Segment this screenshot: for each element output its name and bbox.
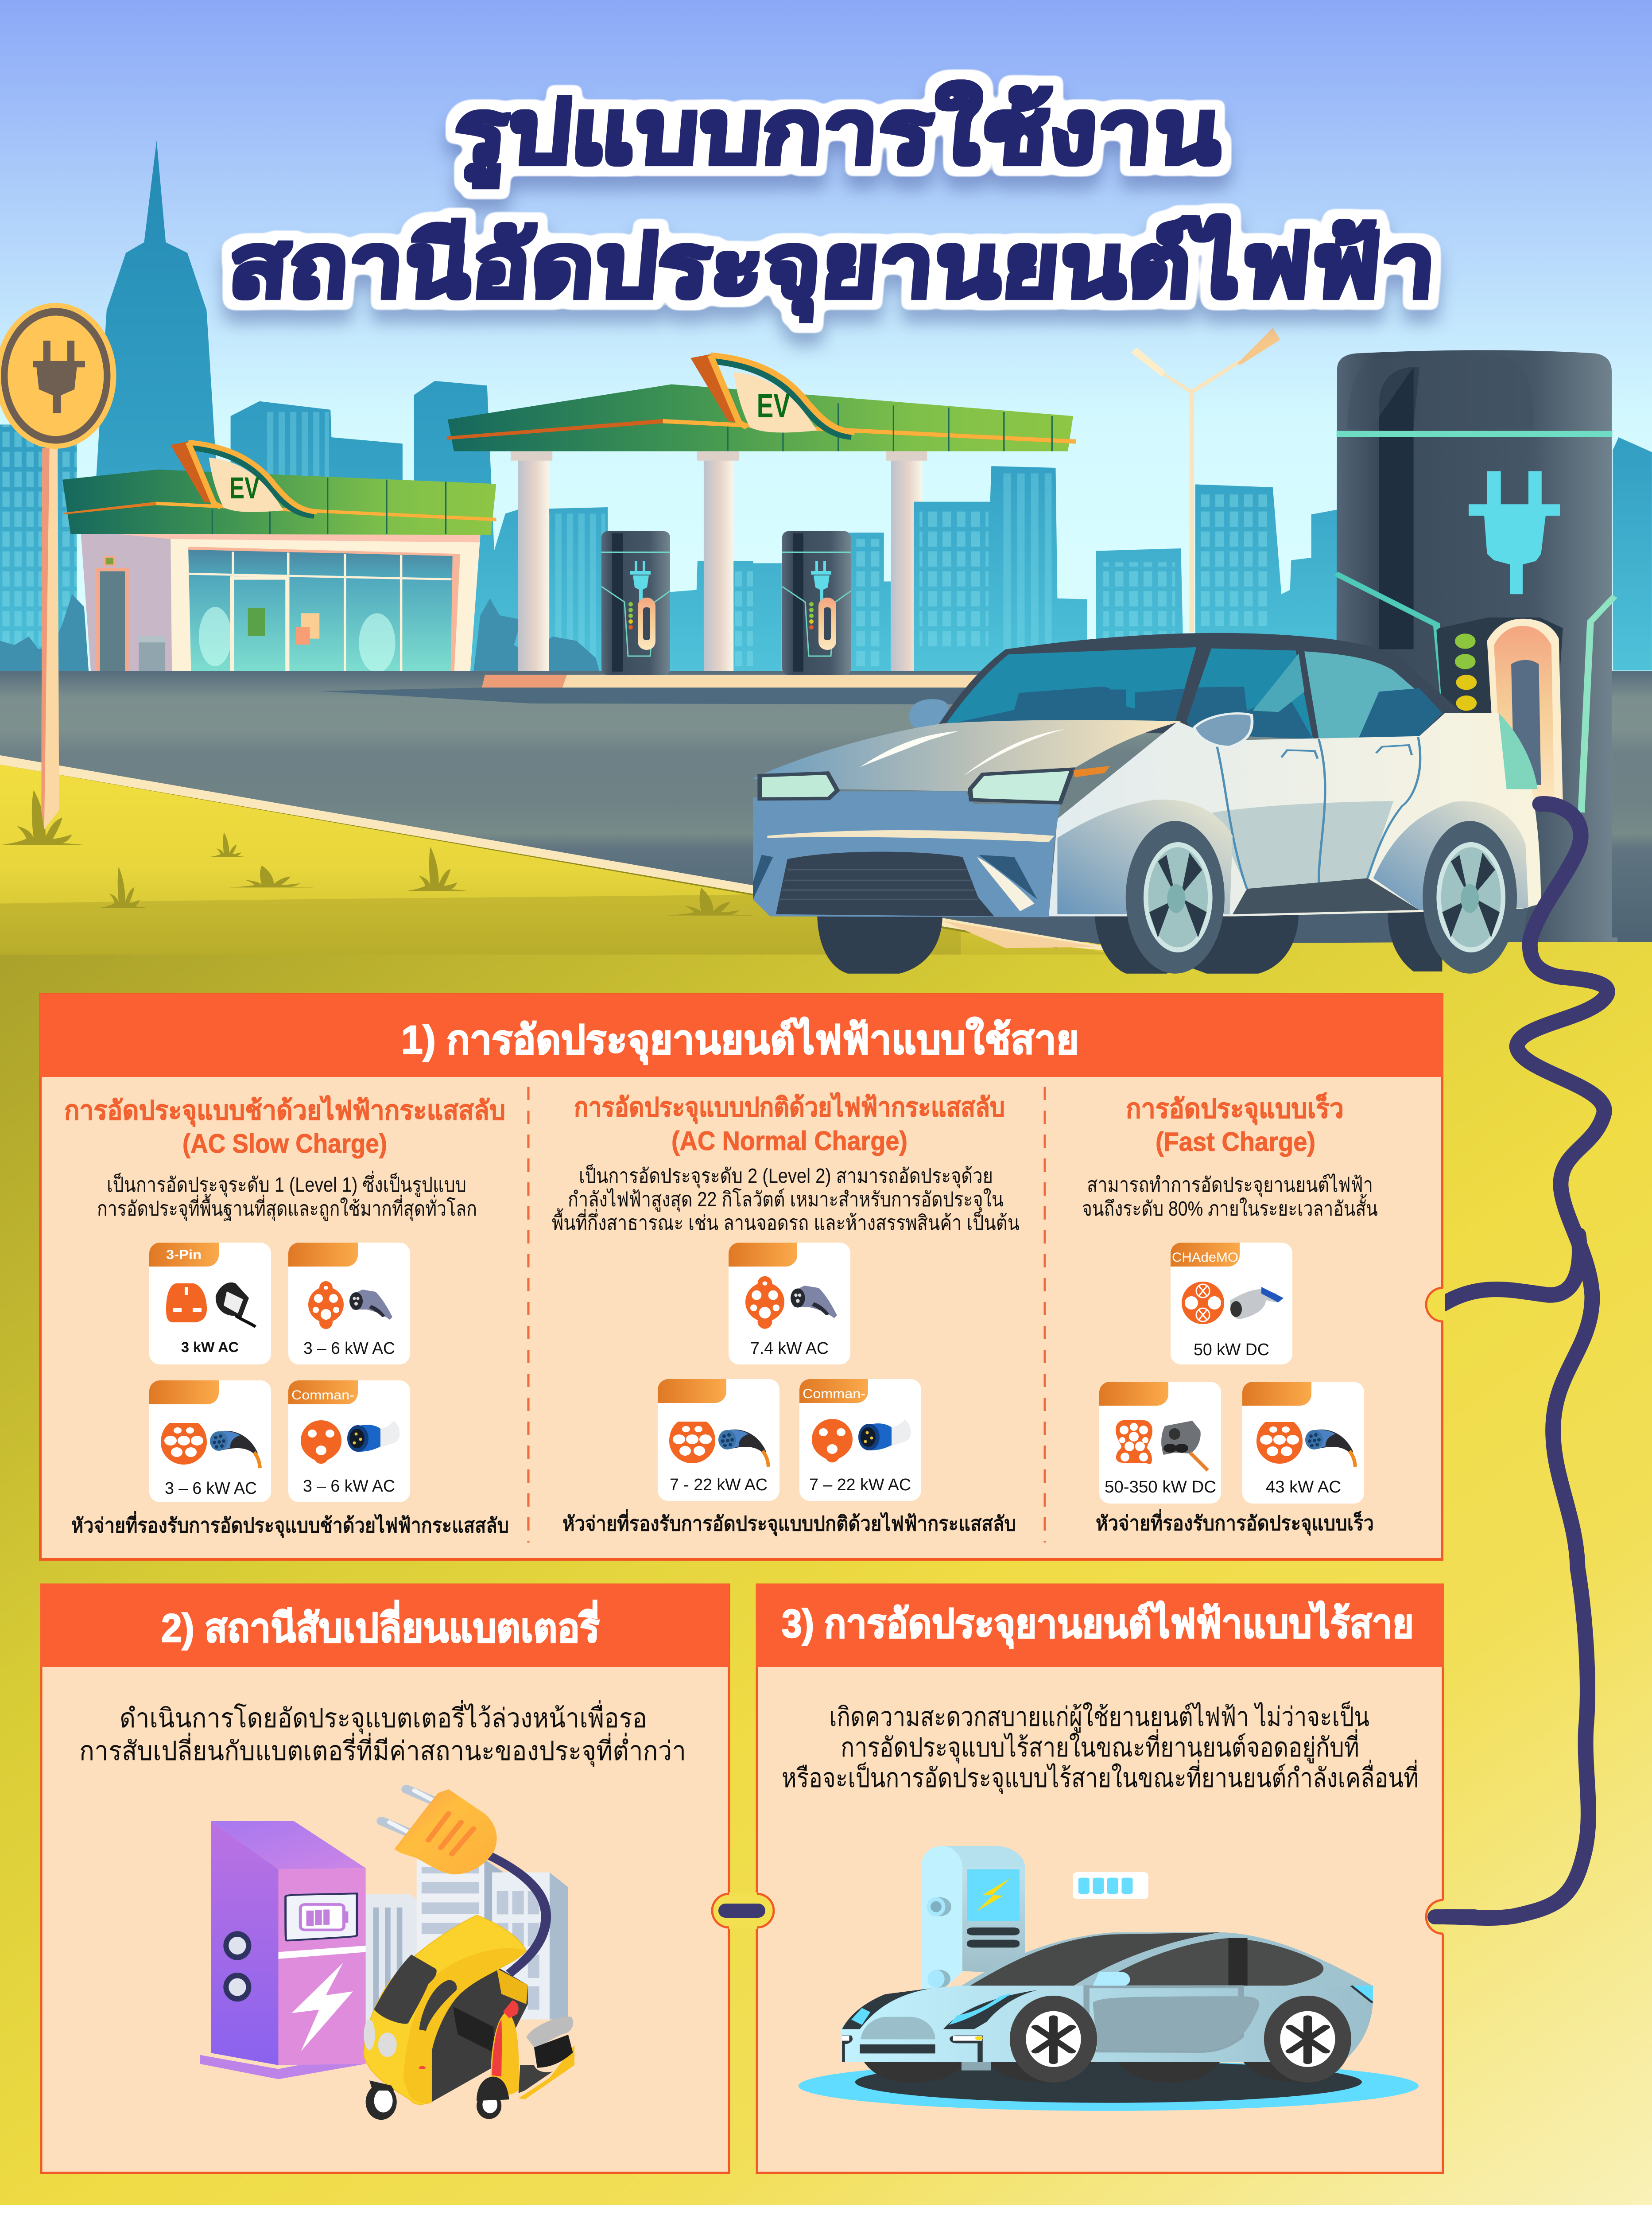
canopy	[447, 384, 1076, 451]
rear wheel	[1264, 1996, 1351, 2083]
wireless car	[841, 1932, 1373, 2083]
road	[0, 671, 1652, 942]
panel 1 header	[39, 994, 1443, 1077]
grille	[776, 852, 994, 917]
sky background	[0, 0, 1652, 678]
door lines	[1217, 737, 1420, 889]
card: 7-22 kW type 2	[658, 1379, 779, 1501]
card: 7-22 kW commando: 7 – 22 kW AC	[809, 1476, 911, 1494]
panel 2: battery swap	[40, 1584, 729, 2173]
panel 2 text: การสับเปลี่ยนกับแบตเตอรี่ที่มีค่าสถานะของประจุที่ต่ำกว่า	[79, 1733, 686, 1767]
card: CCS: 50-350 kW DC	[1105, 1478, 1216, 1496]
card: 43 kW AC: 43 kW AC	[1266, 1478, 1341, 1496]
panel 3 header	[756, 1584, 1444, 1667]
charging cable	[1441, 804, 1607, 1918]
hero illustration: left half	[0, 140, 1076, 678]
card: 7.4 kW	[729, 1243, 850, 1364]
front wheel	[1126, 821, 1225, 974]
column 2: AC normal charge: หัวจ่ายที่รองรับการอัดประจุแบบปกติด้วยไฟฟ้ากระแสสลับ	[562, 1509, 1016, 1536]
column 1: AC slow charge: (AC Slow Charge)	[182, 1129, 387, 1158]
store building	[81, 531, 481, 678]
panel 2 header	[40, 1584, 729, 1667]
road sign	[0, 303, 116, 829]
orange plug	[382, 1789, 497, 1874]
panel 3 header: 3) การอัดประจุยานยนต์ไฟฟ้าแบบไร้สาย	[782, 1601, 1414, 1649]
column 3: fast charge: สามารถทำการอัดประจุยานยนต์ไฟฟ้า	[1087, 1173, 1373, 1197]
card: CHAdeMO: CHAdeMO	[1172, 1250, 1238, 1265]
card: 3-pin	[149, 1243, 271, 1364]
title	[224, 81, 1441, 321]
card: type 1	[288, 1243, 410, 1364]
side mirror	[1194, 713, 1252, 747]
column 1: AC slow charge: การอัดประจุที่พื้นฐานที่สุดและถูกใช้มากที่สุดทั่วโลก	[97, 1194, 477, 1221]
skyline left	[0, 140, 753, 675]
cable	[489, 1855, 546, 1974]
panel 2 text	[79, 1700, 686, 1767]
front fascia	[753, 791, 1060, 917]
card: CHAdeMO: 50 kW DC	[1194, 1341, 1269, 1359]
panel 2 text: ดำเนินการโดยอัดประจุแบตเตอรี่ไว้ล่วงหน้าเพื่อรอ	[120, 1700, 647, 1734]
cable branch to panel 1	[1443, 1235, 1579, 1304]
card: 3-pin: 3 kW AC	[181, 1339, 239, 1355]
hero illustration: right skyline	[753, 437, 1652, 675]
column 3: fast charge	[1082, 1092, 1378, 1536]
panel 3 text	[782, 1701, 1419, 1794]
column 3: fast charge: หัวจ่ายที่รองรับการอัดประจุแบบเร็ว	[1096, 1509, 1374, 1536]
front wheel	[1010, 1996, 1097, 2083]
street lamp	[1131, 328, 1280, 632]
card: type 2	[149, 1380, 271, 1502]
electric car	[753, 633, 1541, 974]
title line 1: รูปแบบการใช้งาน	[450, 81, 1226, 187]
column 2: AC normal charge	[552, 1092, 1020, 1536]
charging pad	[799, 2061, 1419, 2111]
footer band	[0, 2205, 1652, 2215]
card: 3-pin: 3-Pin	[166, 1247, 202, 1262]
column 3: fast charge: จนถึงระดับ 80% ภายในระยะเวลาอันสั้น	[1082, 1194, 1378, 1220]
card: type 2: 3 – 6 kW AC	[165, 1479, 257, 1498]
column dividers	[528, 1087, 1045, 1543]
charging port	[1487, 619, 1563, 802]
battery swap illustration	[200, 1789, 574, 2120]
title line 2: สถานีอัดประจุยานยนต์ไฟฟ้า	[224, 215, 1441, 321]
wireless charging illustration	[799, 1846, 1419, 2111]
big charging station	[1331, 350, 1617, 942]
charger plug icon	[1469, 471, 1560, 594]
yellow electric tricycle	[364, 1915, 574, 2120]
rear wheel	[1423, 821, 1517, 974]
panel 1: wired charging	[39, 994, 1445, 1559]
forecourt platform	[319, 675, 979, 704]
column 2: AC normal charge: พื้นที่กึ่งสาธารณะ เช่น ลานจอดรถ และห้างสรรพสินค้า เป็นต้น	[552, 1208, 1020, 1234]
grass verge	[0, 303, 1105, 955]
battery level indicator	[1073, 1872, 1148, 1899]
rocker	[1233, 878, 1419, 914]
card: 7-22 kW type 2: 7 - 22 kW AC	[670, 1476, 768, 1494]
purple battery kiosk	[200, 1821, 366, 2079]
card: 43 kW AC	[1242, 1382, 1364, 1504]
column 3: fast charge: (Fast Charge)	[1156, 1127, 1315, 1157]
bushes	[0, 594, 601, 675]
panel 3 text: หรือจะเป็นการอัดประจุแบบไร้สายในขณะที่ยานยนต์กำลังเคลื่อนที่	[782, 1760, 1419, 1794]
far mirror	[909, 699, 948, 730]
lower yellow background	[0, 939, 1652, 2206]
card: commando	[288, 1380, 410, 1502]
roof and glass	[937, 633, 1462, 742]
store roof	[62, 470, 496, 535]
canopy EV sign	[690, 354, 855, 436]
panel 3 text: เกิดความสะดวกสบายแก่ผู้ใช้ยานยนต์ไฟฟ้า ไม่ว่าจะเป็น	[829, 1701, 1369, 1733]
panel 2 header: 2) สถานีสับเปลี่ยนแบตเตอรี่	[161, 1600, 600, 1651]
background buildings	[366, 1859, 568, 2055]
panel 3 text: การอัดประจุแบบไร้สายในขณะที่ยานยนต์จอดอยู่กับที่	[841, 1729, 1359, 1764]
store EV sign	[171, 442, 317, 515]
small charger 2	[782, 531, 851, 675]
card: commando: Comman-	[291, 1388, 354, 1403]
fender arches	[1057, 800, 1233, 914]
card: 7-22 kW commando: Comman-	[803, 1387, 865, 1401]
small charger 1	[601, 531, 670, 675]
column 2: AC normal charge: (AC Normal Charge)	[671, 1126, 907, 1156]
card: CHAdeMO	[1171, 1243, 1292, 1364]
card: CCS	[1099, 1382, 1221, 1504]
underbody and tyres	[817, 904, 1528, 974]
canopy pillars	[511, 451, 927, 675]
column 2: AC normal charge: การอัดประจุแบบปกติด้วยไฟฟ้ากระแสสลับ	[574, 1092, 1005, 1124]
column 1: AC slow charge: การอัดประจุแบบช้าด้วยไฟฟ้ากระแสสลับ	[64, 1095, 505, 1127]
card: 7.4 kW: 7.4 kW AC	[750, 1339, 829, 1358]
status lights	[1455, 633, 1476, 649]
column 2: AC normal charge: กำลังไฟฟ้าสูงสุด 22 กิโลวัตต์ เหมาะสำหรับการอัดประจุใน	[568, 1188, 1004, 1212]
panel 1 header: 1) การอัดประจุยานยนต์ไฟฟ้าแบบใช้สาย	[401, 1017, 1079, 1065]
hood	[753, 720, 1181, 791]
column 2: AC normal charge: เป็นการอัดประจุระดับ 2 (Level 2) สามารถอัดประจุด้วย	[579, 1164, 993, 1189]
charging pillar	[921, 1846, 1025, 1990]
headlights	[760, 773, 838, 799]
card: 7-22 kW commando	[799, 1379, 921, 1501]
grass tufts	[0, 790, 754, 916]
notch for cable panel 1	[1426, 1288, 1445, 1321]
column 1: AC slow charge	[64, 1095, 509, 1538]
body side	[1049, 713, 1541, 917]
column 1: AC slow charge: เป็นการอัดประจุระดับ 1 (Level 1) ซึ่งเป็นรูปแบบ	[107, 1170, 466, 1197]
card: commando: 3 – 6 kW AC	[303, 1477, 395, 1496]
card: type 1: 3 – 6 kW AC	[303, 1339, 395, 1358]
column 1: AC slow charge: หัวจ่ายที่รองรับการอัดประจุแบบช้าด้วยไฟฟ้ากระแสสลับ	[71, 1511, 509, 1538]
cable notches and link between panels	[712, 1892, 1475, 1934]
column 3: fast charge: การอัดประจุแบบเร็ว	[1126, 1092, 1344, 1125]
tail light	[1499, 713, 1538, 789]
panel 3: wireless charging	[756, 1584, 1444, 2173]
